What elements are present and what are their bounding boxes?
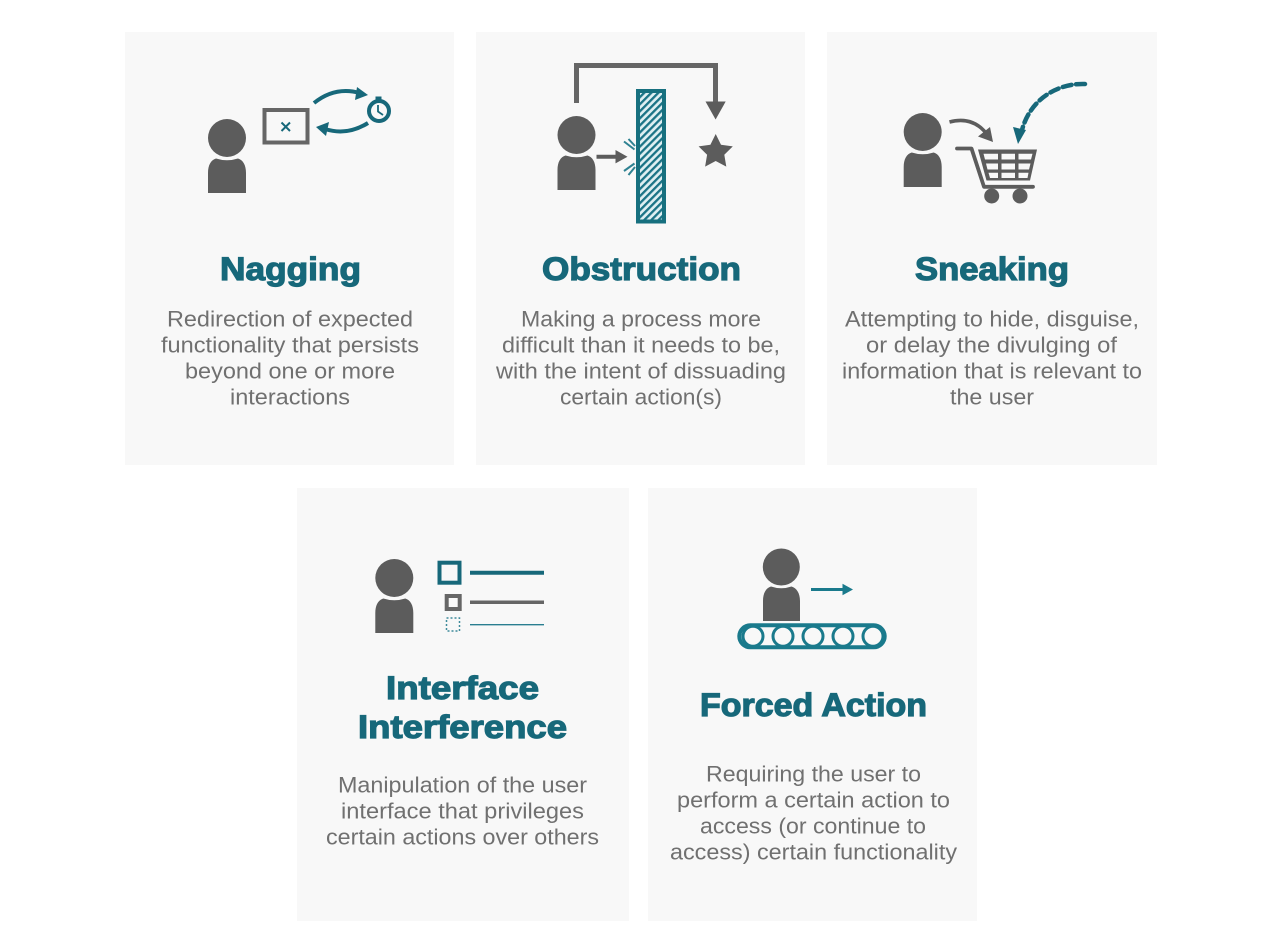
description: obstruction: certain action(s) <box>560 384 722 410</box>
description: nagging: functionality that persists <box>161 332 419 358</box>
panel background <box>648 488 977 921</box>
description: sneaking: Attempting to hide, disguise, <box>845 306 1139 332</box>
panel: obstruction <box>476 32 805 465</box>
panel background <box>297 488 629 921</box>
panel: interface interference <box>297 488 629 921</box>
icon: interface interference <box>375 559 544 633</box>
description: nagging: beyond one or more <box>185 358 395 384</box>
icon: obstruction <box>558 66 733 222</box>
description: obstruction: with the intent of dissuading <box>495 358 786 384</box>
heading: forced action: Forced Action <box>700 687 927 723</box>
description: obstruction: difficult than it needs to be, <box>502 332 780 358</box>
description: interface interference: certain actions over others <box>326 824 599 850</box>
heading: interface interference: Interference <box>358 709 567 745</box>
panel: forced action <box>648 488 977 921</box>
description: forced action: perform a certain action to <box>677 788 950 812</box>
description: sneaking: information that is relevant to <box>842 358 1142 384</box>
description: nagging: interactions <box>230 384 350 410</box>
panel background <box>476 32 805 465</box>
icon: forced action <box>739 548 885 647</box>
description: forced action: access) certain functionality <box>670 840 957 864</box>
panel background <box>125 32 454 465</box>
description: forced action: Requiring the user to <box>706 762 921 786</box>
heading: interface interference: Interface <box>386 670 539 706</box>
description: obstruction <box>495 306 786 410</box>
description: sneaking <box>842 306 1142 410</box>
description: obstruction: Making a process more <box>521 306 761 332</box>
panel: nagging <box>125 32 454 465</box>
panel background <box>827 32 1157 465</box>
description: nagging: Redirection of expected <box>167 306 413 332</box>
description: interface interference: interface that privileges <box>341 798 584 824</box>
description: sneaking: or delay the divulging of <box>866 332 1118 358</box>
heading: nagging: Nagging <box>220 251 361 287</box>
description: interface interference: Manipulation of the user <box>338 772 587 798</box>
heading: sneaking: Sneaking <box>915 251 1069 287</box>
description: nagging <box>161 306 419 410</box>
icon: nagging <box>208 87 389 193</box>
heading: interface interference <box>358 670 567 745</box>
heading: obstruction: Obstruction <box>542 251 741 287</box>
panel: sneaking <box>827 32 1157 465</box>
icon: sneaking <box>904 84 1085 204</box>
description: sneaking: the user <box>950 384 1034 410</box>
description: forced action: access (or continue to <box>700 814 926 838</box>
description: forced action <box>670 762 957 864</box>
description: interface interference <box>326 772 599 850</box>
